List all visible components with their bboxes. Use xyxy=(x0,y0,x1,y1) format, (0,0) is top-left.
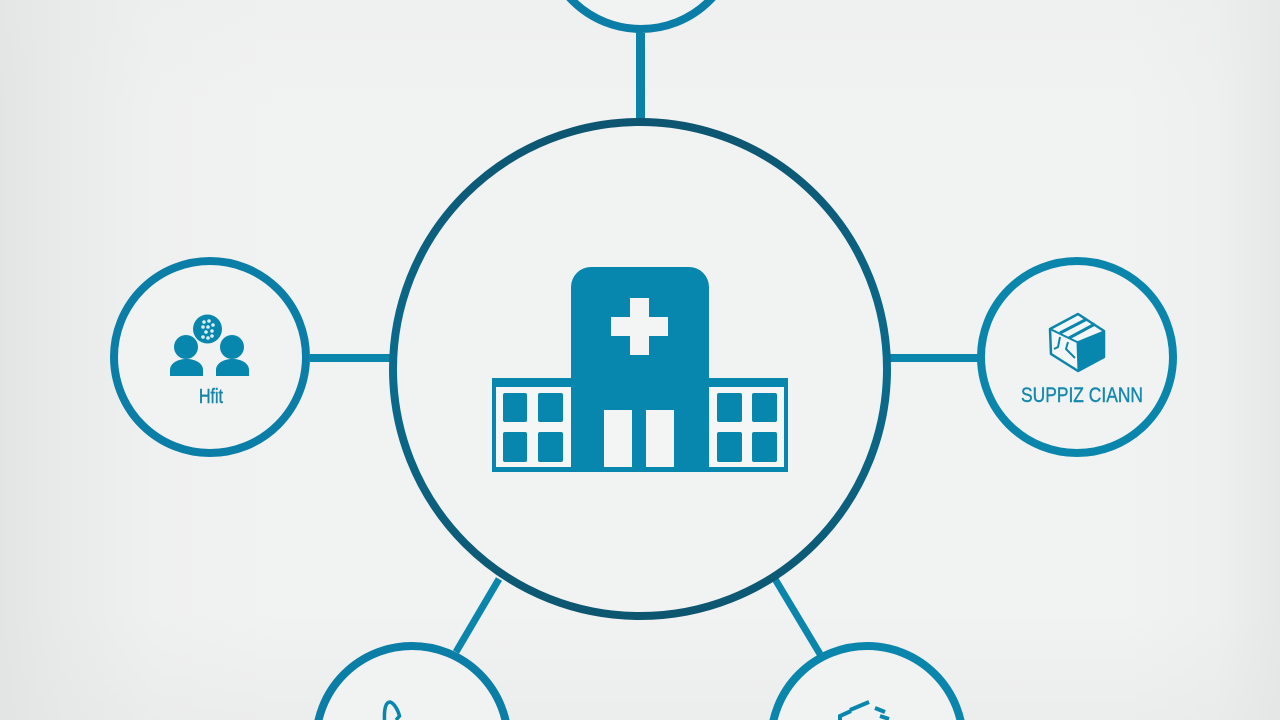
connector: right xyxy=(890,354,978,362)
central circle xyxy=(393,122,887,616)
connector: left xyxy=(310,354,390,362)
label: left node: Hfit xyxy=(199,386,223,408)
box outline xyxy=(1050,314,1104,371)
icon: bottom left partial xyxy=(384,702,400,720)
box top stripes xyxy=(1060,319,1095,338)
small top circle with pattern xyxy=(193,314,222,344)
connector: top xyxy=(636,33,645,119)
node: bottom right circle xyxy=(771,646,963,720)
hospital doors xyxy=(604,410,674,467)
node: top circle xyxy=(544,0,738,29)
label: supply chain: SUPPIZ CIANN xyxy=(1021,384,1143,407)
node: left circle xyxy=(114,261,306,453)
connector: bottom right xyxy=(775,579,820,654)
box edge xyxy=(1050,329,1077,342)
box tape detail xyxy=(1054,337,1075,358)
icon: people group xyxy=(170,314,249,376)
hospital right wing xyxy=(708,378,788,472)
icon: bottom right partial box xyxy=(840,702,889,720)
hospital cross xyxy=(611,298,668,355)
hospital central tower xyxy=(571,267,709,472)
icon: box xyxy=(1050,314,1104,371)
left person xyxy=(170,335,203,376)
right person xyxy=(216,335,249,376)
connector: bottom left xyxy=(456,579,499,652)
box right face xyxy=(1077,331,1104,371)
hospital left wing xyxy=(492,378,572,472)
node: right circle xyxy=(981,261,1173,453)
node: bottom left circle xyxy=(316,646,508,720)
icon: hospital xyxy=(492,267,788,472)
